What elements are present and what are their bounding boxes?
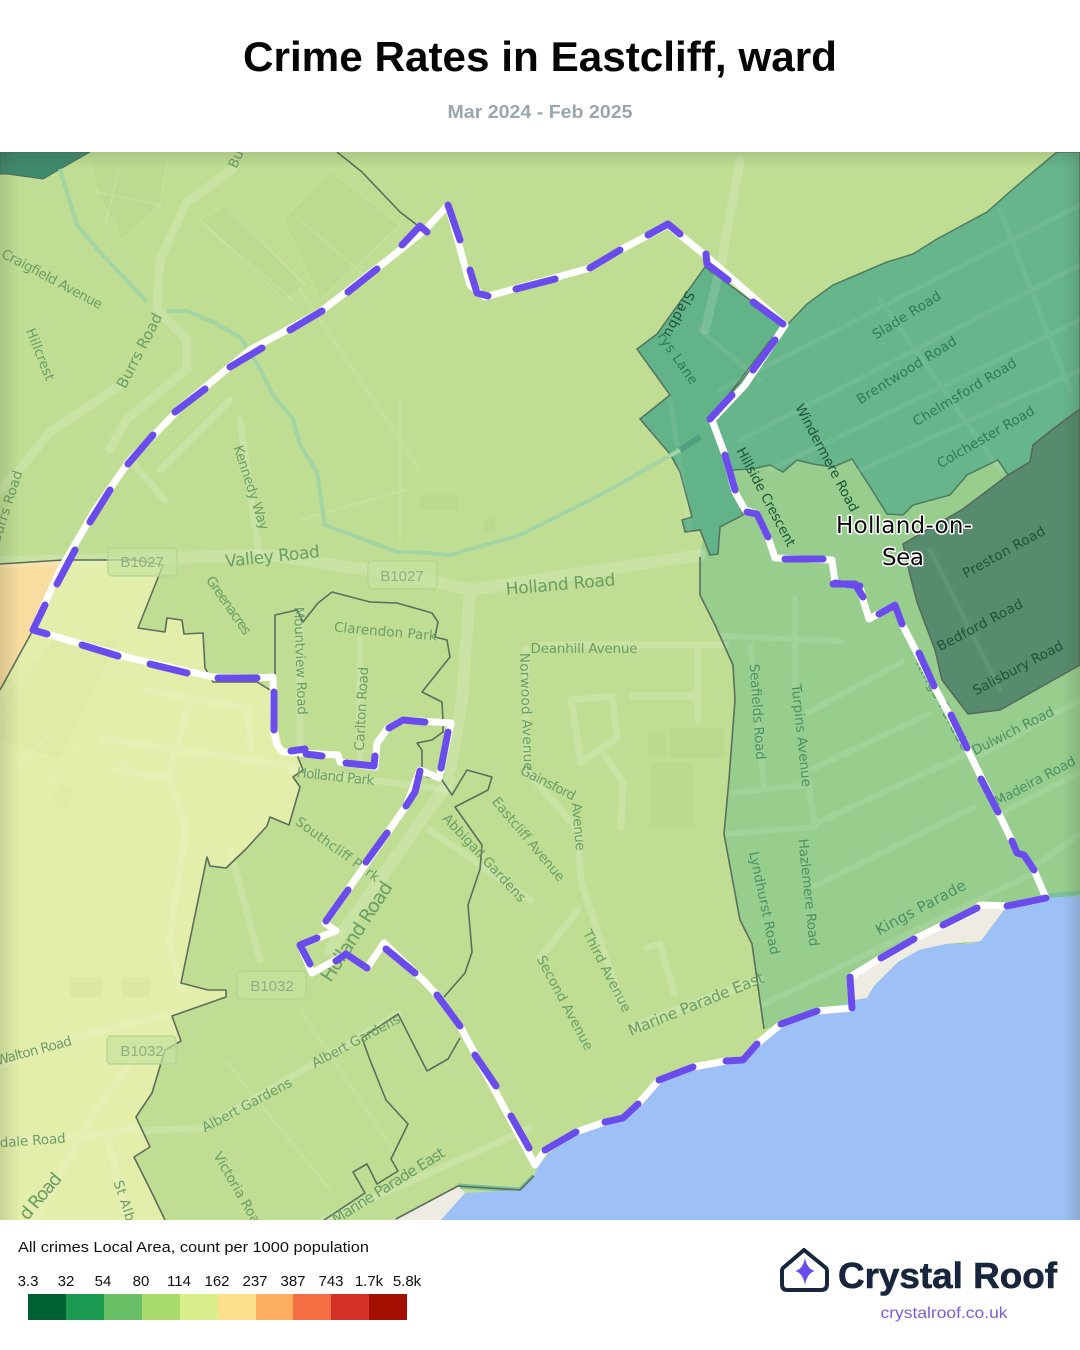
road labels: Colchester Road — [934, 403, 1038, 472]
legend values: 387 — [280, 1273, 306, 1290]
edge vignette — [0, 152, 1080, 1220]
coastal green strip — [458, 893, 1080, 1190]
road labels: Salisbury Road — [970, 638, 1066, 699]
road labels: Valley Road — [224, 542, 321, 572]
legend values: 743 — [318, 1273, 344, 1290]
title: Crime Rates in Eastcliff, ward — [243, 33, 837, 80]
road labels: Turpins Avenue — [788, 683, 814, 788]
road labels: Holland Park — [296, 765, 375, 789]
road labels: Windermere Road — [791, 401, 862, 515]
road labels: Kings Parade — [912, 657, 973, 753]
road labels: Victoria Roa — [210, 1149, 263, 1227]
road labels: Preston Road — [960, 523, 1048, 582]
road labels: St Alb — [110, 1178, 138, 1223]
road labels: Southcliff Park — [292, 814, 383, 886]
legend values: 1.7k — [355, 1273, 384, 1290]
legend — [18, 1239, 422, 1320]
legend values: 237 — [242, 1273, 268, 1290]
road number badges: B1027 — [120, 554, 164, 571]
road labels: Chelmsford Road — [910, 355, 1020, 430]
road labels: Bedford Road — [934, 596, 1026, 655]
road labels: Second Avenue — [533, 953, 596, 1053]
road labels: Mountview Road — [290, 607, 310, 715]
road labels: Marine Parade East — [328, 1144, 448, 1228]
sand beach — [396, 906, 1007, 1220]
road labels — [0, 148, 1079, 1228]
road labels: Dulwich Road — [969, 704, 1057, 759]
road labels: Third Avenue — [579, 927, 634, 1015]
legend values: 54 — [95, 1273, 111, 1290]
area: yellow-green west — [0, 560, 303, 1220]
legend values: 162 — [204, 1273, 230, 1290]
area: dark green south-east of town — [903, 409, 1080, 714]
ward sub-boundaries — [0, 152, 764, 1220]
road labels: Marine Parade East — [626, 969, 767, 1040]
logo — [782, 1250, 1058, 1322]
road labels: Albert Gardens — [309, 1011, 403, 1072]
road number badges: B1032 — [120, 1043, 164, 1060]
area: teal north-east — [710, 152, 1080, 515]
road labels: Avenue — [568, 802, 588, 851]
road labels: Eastcliff Avenue — [488, 794, 568, 885]
road labels: Madeira Road — [992, 753, 1079, 810]
road labels: Kennedy Way — [230, 443, 272, 532]
legend values: 32 — [58, 1273, 74, 1290]
road labels: Norwood Avenue — [516, 653, 536, 771]
road labels: Burrs Road — [113, 310, 166, 391]
legend values: 114 — [167, 1273, 191, 1290]
sea — [441, 896, 1080, 1220]
legend colour scale — [28, 1294, 407, 1320]
place label: Holland-on-Sea — [836, 513, 972, 571]
road labels: Albert Gardens — [199, 1075, 295, 1136]
road labels: Hillcrest — [22, 326, 57, 383]
road labels: Holland Road — [505, 570, 616, 600]
road labels: dale Road — [0, 1131, 66, 1151]
place label: Holland-on-Sea: Sea — [882, 545, 924, 571]
road labels: Carlton Road — [352, 666, 372, 751]
place label: Holland-on-Sea: Holland-on- — [836, 513, 972, 539]
allotments and fields — [8, 163, 400, 815]
road labels: Slade Road — [870, 288, 944, 343]
road labels: Greenacres — [202, 573, 254, 638]
legend values — [18, 1273, 422, 1290]
road labels: Clarendon Park — [333, 620, 438, 644]
road number badges: B1032 — [250, 978, 294, 995]
road labels: Bu — [225, 148, 247, 171]
road labels: Hillside Crescent — [733, 445, 798, 549]
road labels: Deanhill Avenue — [530, 641, 638, 657]
area: mid green Holland-on-Sea — [700, 460, 1080, 1029]
road labels: Seafields Road — [746, 663, 768, 760]
road number badges — [107, 548, 437, 1064]
road labels: Abbigail Gardens — [439, 811, 529, 906]
road labels: Craigfield Avenue — [0, 246, 105, 313]
legend values: 80 — [133, 1273, 149, 1290]
road labels: Hazlemere Road — [794, 838, 822, 947]
ward boundary: white line — [33, 205, 1046, 1165]
subtitle: date range: Mar 2024 - Feb 2025 — [448, 102, 632, 122]
road labels: Kings Parade — [872, 876, 969, 939]
area: orange-tan west — [0, 560, 63, 690]
legend title: All crimes Local Area, count per 1000 population — [18, 1239, 369, 1256]
area: teal Sladburys Lane — [637, 267, 783, 555]
legend values: 3.3 — [18, 1273, 38, 1290]
area: dark teal corner — [0, 152, 90, 179]
road labels: Lyndhurst Road — [745, 850, 783, 956]
road labels: Holland Road — [316, 878, 398, 986]
road labels: Brentwood Road — [854, 333, 960, 408]
road labels: rys Lane — [654, 330, 701, 388]
river — [60, 169, 680, 555]
legend values: 5.8k — [393, 1273, 422, 1290]
icon: house with sparkle — [782, 1250, 827, 1290]
road number badges: B1027 — [380, 568, 424, 585]
roads in green town blocks — [670, 205, 1080, 1006]
buildings — [420, 495, 724, 826]
website: crystalroof.co.uk — [880, 1305, 1009, 1322]
road labels: d Road — [15, 1169, 67, 1224]
road labels: Gainsford — [517, 763, 578, 804]
ward boundary: purple dashes — [33, 205, 1046, 1150]
logo wordmark: Crystal Roof — [838, 1255, 1058, 1296]
roads — [0, 160, 760, 1220]
road labels: Sladbu — [660, 288, 697, 340]
